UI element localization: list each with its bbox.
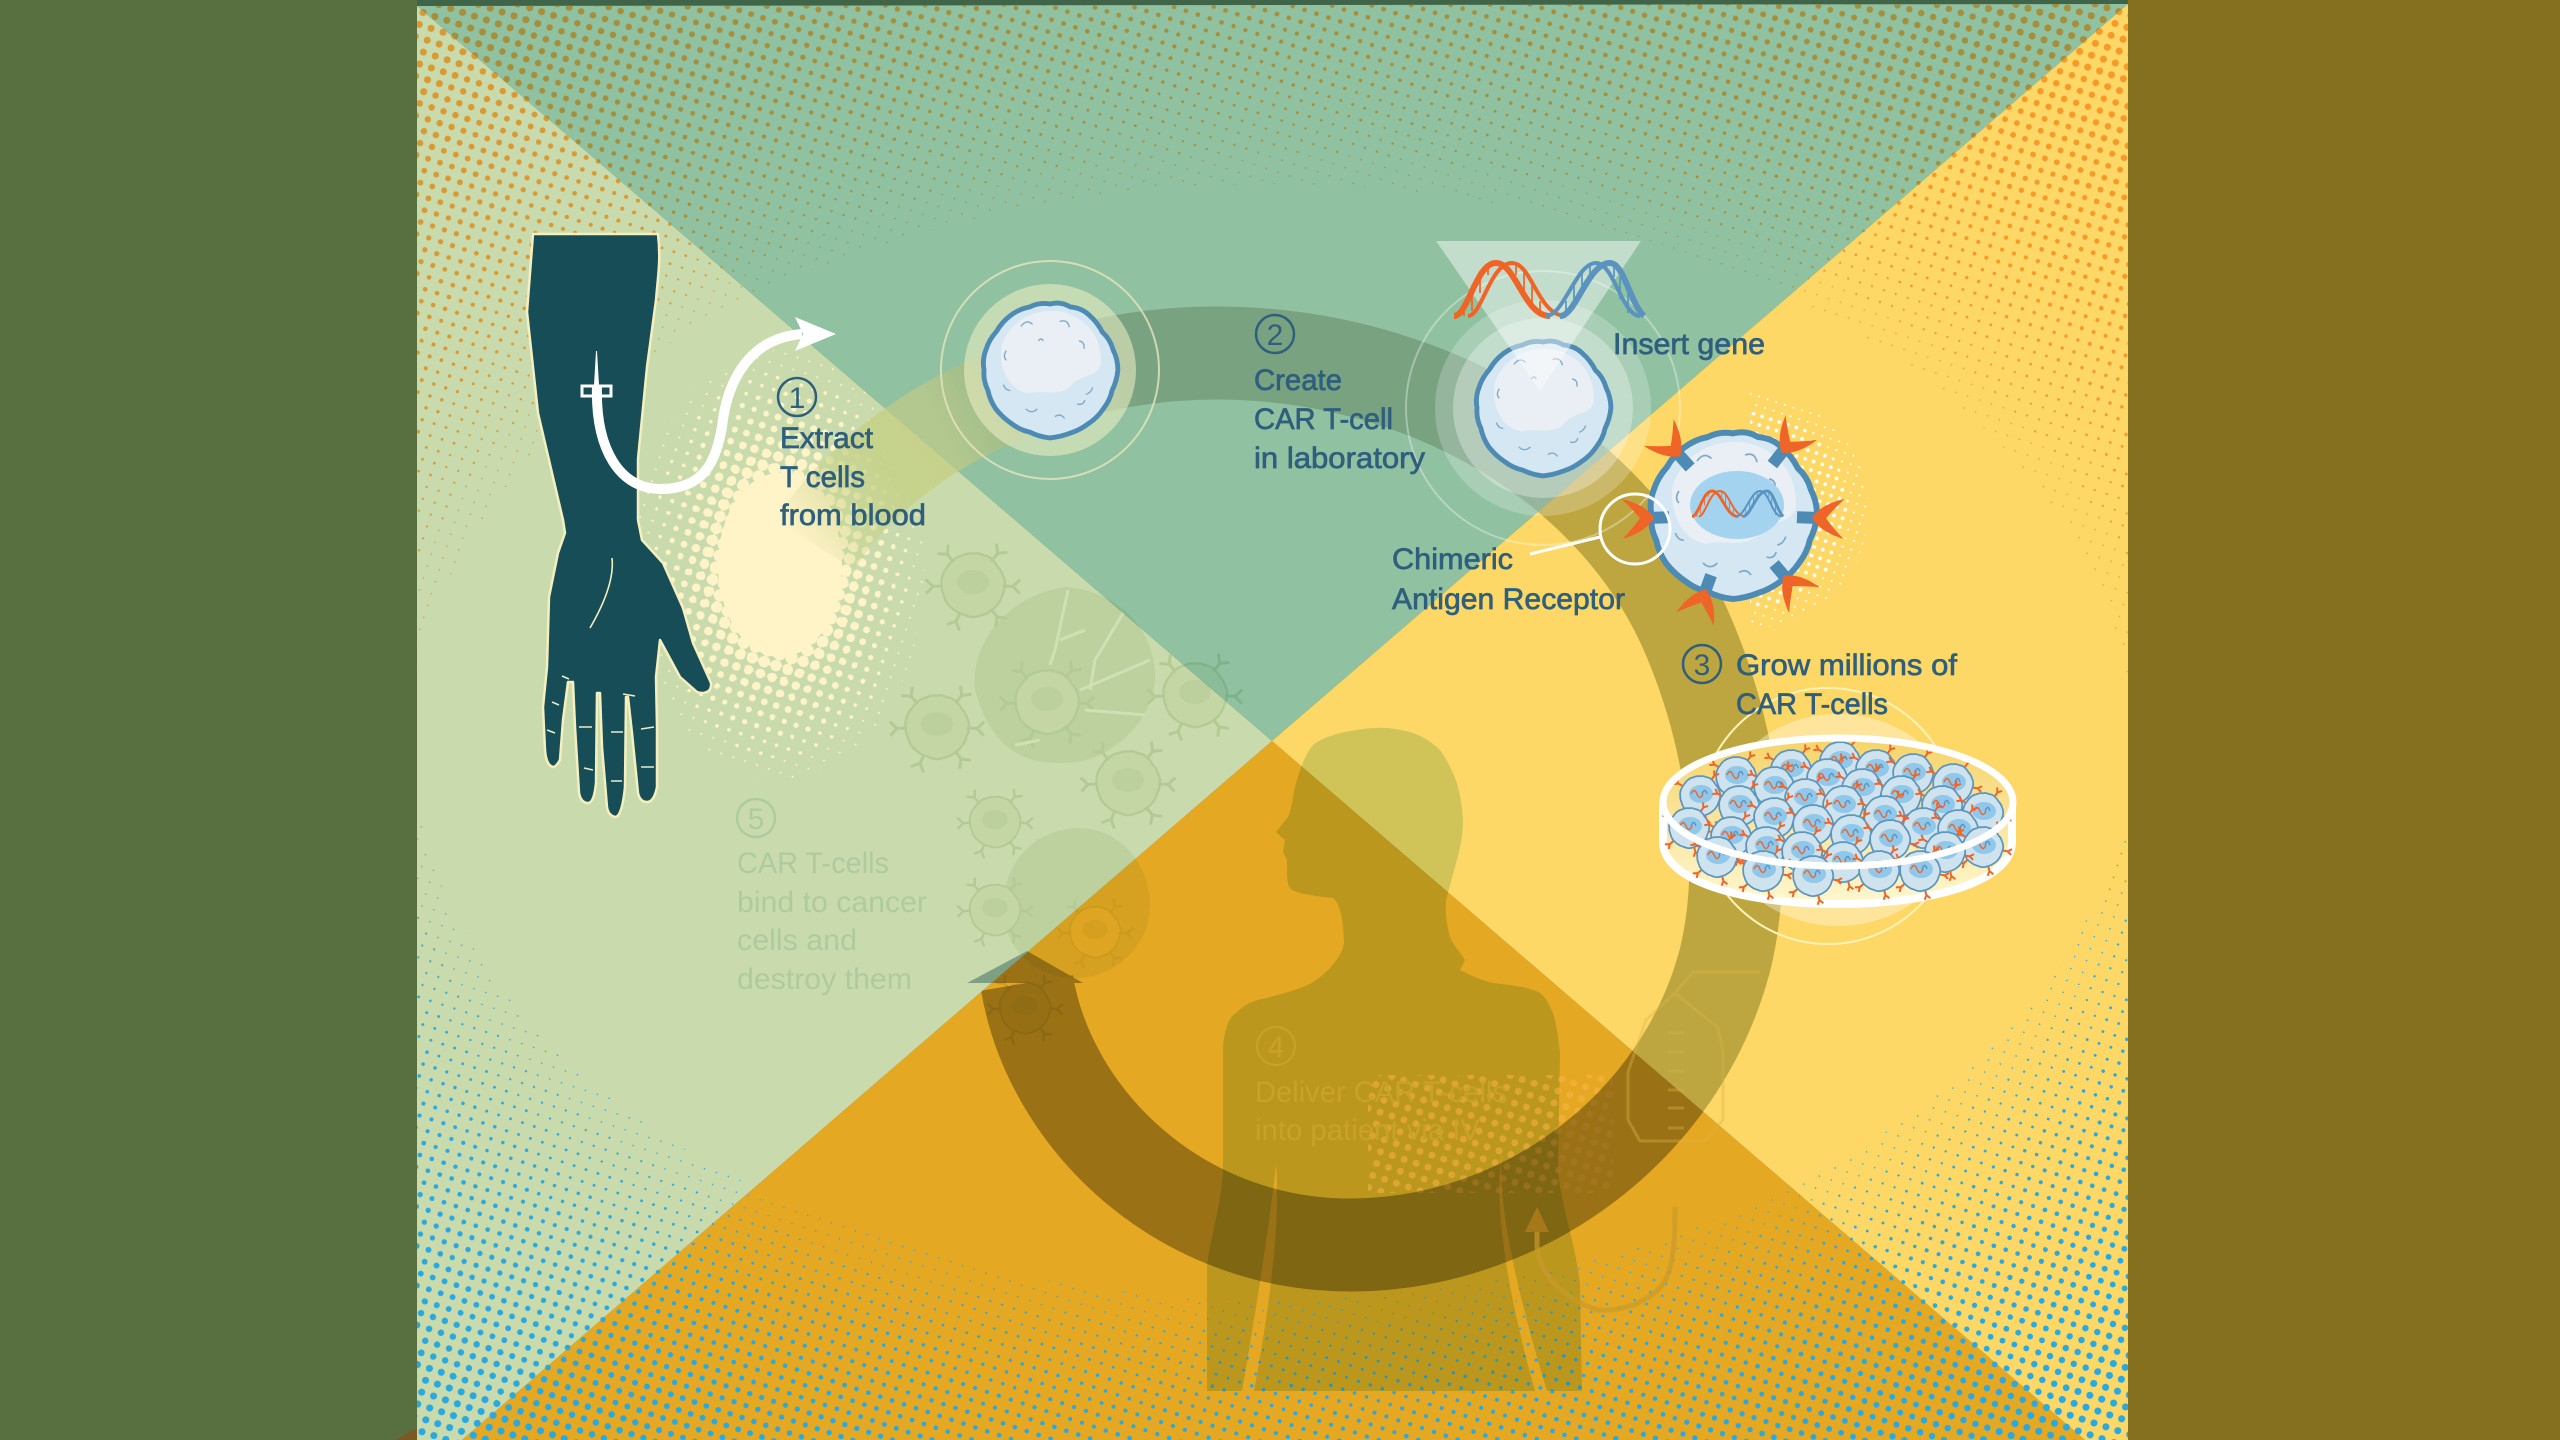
outer halo ring bbox=[941, 261, 1159, 479]
ghost T-cell 4 bbox=[1148, 654, 1242, 741]
petri dish bbox=[1662, 688, 2013, 944]
needle bbox=[594, 351, 599, 385]
step 3 label bbox=[1683, 645, 1958, 721]
ghost T-cell 1 bbox=[926, 544, 1020, 631]
ghost T-cell 7 bbox=[957, 877, 1033, 946]
halo bbox=[1718, 714, 1958, 926]
cell 2 with halo bbox=[1406, 271, 1680, 545]
inner halo bbox=[964, 284, 1136, 456]
nucleus bbox=[1690, 471, 1784, 539]
insert gene label: Insert gene bbox=[1613, 328, 1765, 361]
ghost T-cell 5 bbox=[1081, 742, 1175, 829]
chimeric antigen receptor label: Chimeric bbox=[1392, 543, 1513, 576]
halo rings bbox=[1435, 300, 1651, 516]
step text: bind to cancer bbox=[737, 886, 927, 919]
step text: cells and bbox=[737, 924, 857, 957]
step text: CAR T-cells bbox=[737, 847, 889, 880]
tube bbox=[1537, 1207, 1675, 1310]
receptor callout circle bbox=[1600, 494, 1670, 564]
cultured CAR T-cells bbox=[1662, 737, 2012, 905]
step number: 5 bbox=[748, 803, 764, 836]
bag level ticks bbox=[1668, 1033, 1684, 1128]
person silhouette bbox=[1207, 728, 1582, 1391]
ghost T-cell 6 bbox=[957, 789, 1033, 858]
step number bbox=[1257, 1027, 1295, 1065]
step number bbox=[1683, 645, 1721, 683]
white halftone behind CAR T-cell bbox=[1750, 392, 1868, 628]
arrow tip bbox=[1525, 1207, 1549, 1232]
step number bbox=[737, 799, 775, 837]
step text bbox=[780, 422, 926, 532]
step text: T cells bbox=[780, 461, 865, 494]
dish lid rim bbox=[1663, 738, 2013, 866]
ghost T-cell 8 bbox=[1057, 899, 1133, 968]
chimeric antigen receptor label: Antigen Receptor bbox=[1392, 583, 1625, 616]
receptor callout leader bbox=[1530, 537, 1600, 554]
quadrant: grow (right) bbox=[1272, 4, 2128, 1440]
dish interior bbox=[1663, 738, 2013, 866]
thin ring bbox=[1406, 271, 1680, 545]
step text: Deliver CAR T-cells bbox=[1255, 1076, 1507, 1109]
step text: Extract bbox=[780, 422, 874, 455]
quadrant: deliver (bottom) bbox=[462, 741, 2085, 1440]
ghosted scene: CAR T-cells attacking cancer cells bbox=[890, 544, 1242, 1044]
quadrant: extract (left) bbox=[417, 6, 1272, 1440]
nucleus DNA bbox=[1692, 491, 1783, 516]
DNA strand bbox=[1454, 263, 1644, 316]
tube arrowhead bbox=[795, 317, 836, 351]
top edge strip bbox=[417, 0, 2128, 6]
T-cell bbox=[1476, 341, 1611, 476]
step text bbox=[1736, 649, 1958, 721]
cell 1 with halo bbox=[941, 261, 1159, 479]
step number: 1 bbox=[789, 382, 805, 415]
step text: CAR T-cells bbox=[1736, 688, 1888, 721]
arc segment: left fade bbox=[788, 408, 1028, 983]
orange halftone patch over torso bbox=[1368, 1075, 1613, 1193]
T-cell bbox=[983, 303, 1118, 438]
tube bbox=[597, 334, 802, 489]
step 5 label bbox=[737, 799, 927, 996]
step 4 label bbox=[1255, 1027, 1507, 1147]
cancer cell upper bbox=[975, 587, 1155, 763]
bag outline bbox=[1628, 972, 1760, 1141]
ghost T-cell 9 bbox=[987, 975, 1063, 1044]
CAR T-cell bbox=[1621, 415, 1845, 626]
arc segment: top bbox=[885, 306, 1610, 512]
step text bbox=[737, 847, 927, 996]
arc segment: bottom with arrowhead bbox=[981, 952, 1703, 1292]
step number: 3 bbox=[1694, 649, 1710, 682]
palm vein bbox=[590, 558, 612, 628]
step number bbox=[1256, 315, 1294, 353]
step 1 label bbox=[778, 378, 926, 532]
arm silhouette bbox=[527, 234, 711, 817]
step text: from blood bbox=[780, 499, 926, 532]
extraction needle and tube bbox=[582, 317, 836, 489]
arc segment: right bbox=[1538, 450, 1781, 1112]
right margin band bbox=[2128, 0, 2560, 1440]
needle hub bbox=[582, 386, 611, 396]
gene insertion beam bbox=[1436, 241, 1641, 391]
step number: 4 bbox=[1268, 1031, 1284, 1064]
cancer cell lower bbox=[1003, 828, 1150, 978]
step text: Create bbox=[1254, 364, 1342, 397]
cream halftone glow behind hand bbox=[635, 350, 925, 780]
bottom-left margin wedge bbox=[395, 1428, 417, 1440]
IV bag (ghosted) bbox=[1628, 972, 1760, 1141]
cancer cell cracks bbox=[1015, 590, 1150, 745]
dish base rim bbox=[1663, 804, 2012, 904]
cell body bbox=[1651, 432, 1817, 599]
step text: destroy them bbox=[737, 963, 912, 996]
step text bbox=[1254, 364, 1425, 475]
left margin band bbox=[0, 0, 417, 1440]
main process arc bbox=[815, 353, 1736, 1245]
background quadrants bbox=[417, 4, 2128, 1440]
step text: Grow millions of bbox=[1736, 649, 1958, 682]
ghost T-cell 3 bbox=[1000, 661, 1094, 748]
step 2 label bbox=[1254, 315, 1425, 475]
step text: in laboratory bbox=[1254, 442, 1425, 475]
halftone corners bbox=[417, 4, 2128, 1440]
chimeric antigen receptor label bbox=[1392, 543, 1625, 616]
step number: 2 bbox=[1267, 319, 1283, 352]
quadrant: create (top) bbox=[417, 4, 2128, 741]
step text bbox=[1255, 1076, 1507, 1147]
ghost T-cell 2 bbox=[890, 686, 984, 773]
knuckle creases bbox=[547, 676, 654, 781]
step text: CAR T-cell bbox=[1254, 403, 1393, 436]
IV tube with arrow bbox=[1525, 1207, 1675, 1310]
step number bbox=[778, 378, 816, 416]
arm and hand bbox=[527, 234, 711, 817]
step text: into patient via IV bbox=[1255, 1114, 1480, 1147]
receptors bbox=[1621, 415, 1845, 626]
